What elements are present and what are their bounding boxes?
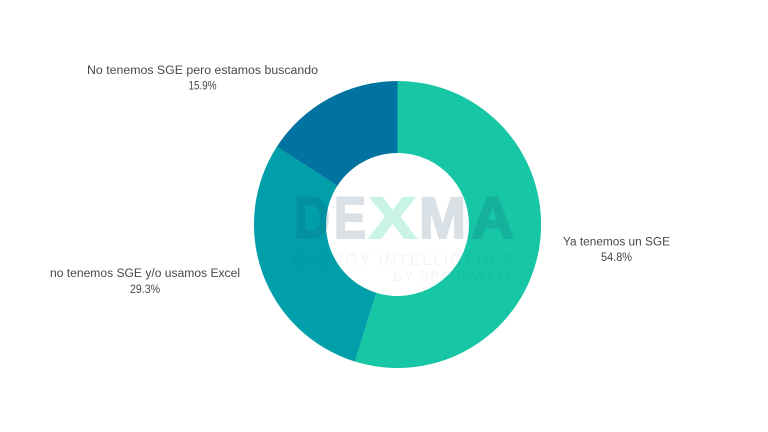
label: no tenemos SGE y/o usamos Excel [50,268,240,296]
label: Ya tenemos un SGE: Ya tenemos un SGE [563,236,670,248]
watermark tagline: ENERGY INTELLIGENCE [293,252,515,269]
segment: No tenemos SGE pero estamos buscando 15.9% [277,81,398,186]
watermark byline: BY SPACEWELL [393,268,515,284]
segment: Ya tenemos un SGE 54.8% [355,81,541,368]
watermark wordmark: D [294,186,330,251]
label: No tenemos SGE pero estamos buscando: 15.9% [188,80,216,92]
watermark wordmark: E [334,186,366,251]
watermark logo [293,186,515,284]
label: Ya tenemos un SGE: 54.8% [601,252,632,264]
label: No tenemos SGE pero estamos buscando [87,65,318,92]
label: Ya tenemos un SGE [563,236,670,264]
watermark letter X: X [369,186,416,251]
label: no tenemos SGE y/o usamos Excel: 29.3% [130,284,160,296]
watermark wordmark: A [471,186,514,251]
watermark wordmark: M [419,186,466,251]
donut chart [254,81,541,368]
label: no tenemos SGE y/o usamos Excel: no tenemos SGE y/o usamos Excel [50,268,240,280]
label: No tenemos SGE pero estamos buscando: No tenemos SGE pero estamos buscando [87,65,318,77]
segment: no tenemos SGE y/o usamos Excel 29.3% [254,147,376,362]
watermark wordmark [294,186,514,251]
